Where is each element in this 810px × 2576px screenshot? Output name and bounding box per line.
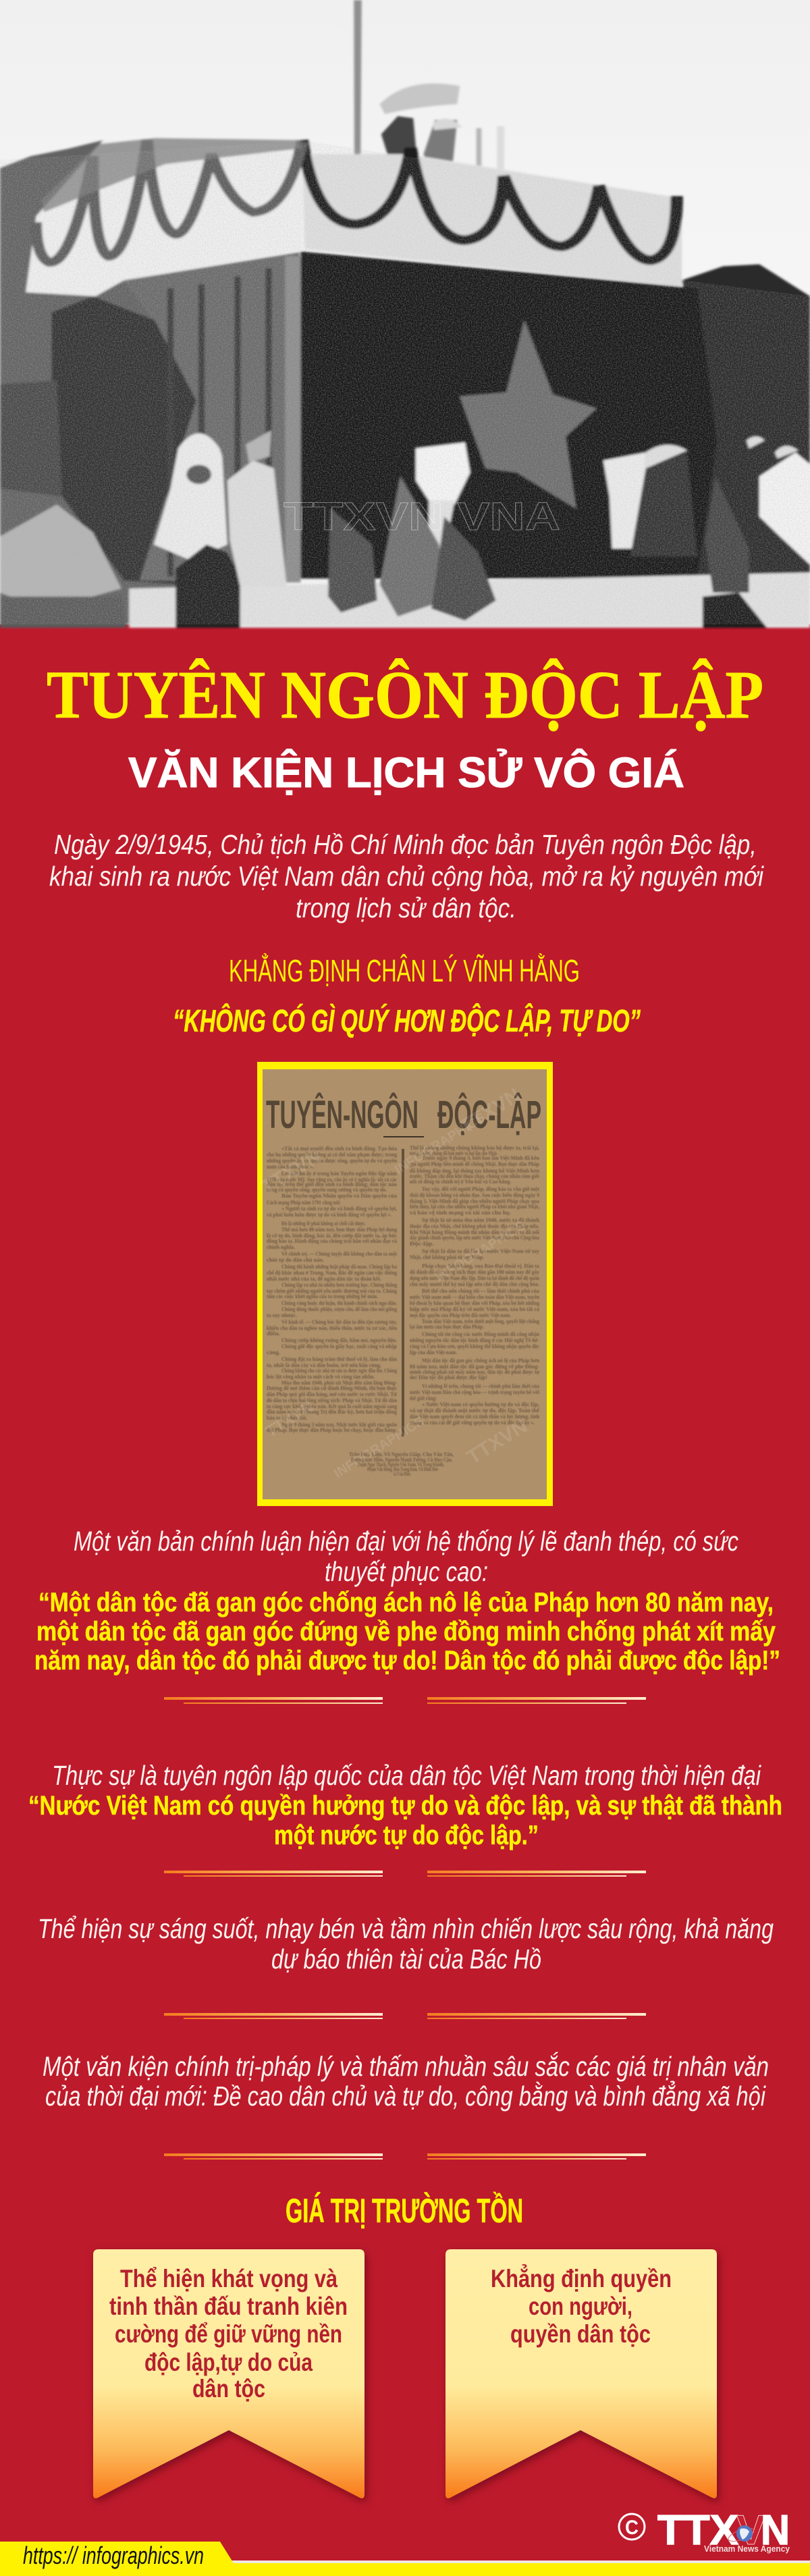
poster body text: tắm các cuộc khởi nghĩa của ta trong những bể máu. [267, 1293, 378, 1299]
document image: declaration poster with yellow frame [257, 1062, 553, 1506]
poster body text: cũng có quyền sống, quyền sung sướng và quyền tự do. [267, 1186, 387, 1193]
statement 2 quote: một nước tự do độc lập.” [274, 1821, 539, 1850]
poster body text: khiến cho dân ta nghèo nàn, thiếu thốn, nước ta xơ xác, tiêu [267, 1324, 397, 1331]
statement 2 quote [28, 1791, 782, 1850]
poster body text: bào ta bị chết đói. [267, 1414, 307, 1421]
poster body text: hiệp ước mà Pháp đã ký về nước Việt-nam, xóa bỏ tất cả [410, 1306, 540, 1312]
poster body text: Toàn dân Việt-nam, trên dưới một lòng, quyết liệt chống [422, 1318, 540, 1324]
poster body text: Trần Huy Liệu, Võ Nguyên Giáp, Chu Văn Tấn, [349, 1451, 454, 1457]
poster body text: thế giới rằng: [410, 1395, 437, 1401]
poster body text: ta càng cực khổ, nghèo nàn. Kết quả là cuối năm ngoái sang [267, 1403, 398, 1410]
poster body text: Chúng lập ra nhà tù nhiều hơn trường học. Chúng thẳng [281, 1281, 398, 1288]
poster body text: và phải luôn luôn được tự do và bình đẳng về quyền lợi ». [267, 1211, 392, 1218]
ribbon card right: Khẳng định quyền [491, 2264, 672, 2292]
poster body text: chính nghĩa. [267, 1243, 295, 1250]
poster body text: dân Pháp quỳ gối đầu hàng, mở cửa nước ta rước Nhật. Từ [267, 1391, 398, 1397]
poster body text: chút tự do dân chủ nào. [267, 1256, 324, 1263]
poster body text: ta, nhất là dân cày và dân buôn, trở nên bần cùng. [267, 1362, 381, 1368]
poster body text: dân Việt-nam quyết đem tất cả tinh thần và lực lượng, tính [410, 1413, 539, 1420]
poster body text: đã đánh đổ các xiềng xích thực dân gần 100 năm nay để gây [410, 1268, 540, 1275]
poster body text: Lê Văn Hiến [394, 1470, 410, 1477]
poster body text: Dương để mở thêm căn cứ đánh Đồng-Minh, thì bọn thực [267, 1385, 397, 1391]
statement 2 [28, 1760, 782, 1850]
subtitle: VĂN KIỆN LỊCH SỬ VÔ GIÁ [128, 749, 684, 797]
poster body text: Thế là chẳng những chúng không bảo hộ được ta, trái lại, [410, 1144, 539, 1151]
ribbon card left: độc lập,tự do của [144, 2349, 313, 2376]
poster body text: 1776 của nước Mỹ. Suy rộng ra, câu ấy có ý nghĩa là: tất cả các [267, 1176, 397, 1183]
ribbon card left: cường để giữ vững nền [115, 2320, 342, 2348]
poster body text: Mùa thu năm 1940, phát-xít Nhật đến xâm lăng Đông- [281, 1379, 397, 1386]
logo: TTXVN Vietnam News Agency: C [625, 2517, 639, 2539]
poster body text: Sự thật là từ mùa thu năm 1940, nước ta đã thành [422, 1216, 539, 1223]
statement 1 [34, 1526, 780, 1675]
ribbon card left: Thể hiện khát vọng và [120, 2265, 338, 2292]
poster body text: điều. [267, 1330, 280, 1337]
poster body text: lại âm mưu của bọn thực dân Pháp. [410, 1323, 484, 1330]
photo: Ho Chi Minh reading the declaration at the stage, 1945 [0, 0, 810, 628]
poster body text: Khi Nhật hàng Đồng-minh thì nhân dân cả nước ta đã nổi [410, 1229, 540, 1235]
poster body text: và bảo vệ tính mạng và tài sản cho họ. [410, 1209, 511, 1216]
poster body text: nước Việt-nam mới — đại biểu cho toàn dân Việt-nam, tuyên [410, 1293, 539, 1300]
poster body text: cho họ những quyền không ai có thể xâm phạm được; trong [267, 1151, 398, 1158]
poster body text: và sự thật đã thành một nước tự do, độc lập. Toàn thể [410, 1407, 539, 1414]
poster body text: do! Dân tộc đó phải được độc lập! [410, 1374, 487, 1380]
statement 3 [38, 1913, 774, 1975]
poster body text: những nguyên tắc dân tộc bình đẳng ở các Hội nghị Tê-hê- [410, 1337, 539, 1343]
poster body text: Sự thật là dân ta đã lấy lại nước Việt-Nam từ tay [422, 1247, 540, 1254]
statement 1 quote [34, 1588, 780, 1675]
poster body text: Đó là những lẽ phải không ai chối cãi được. [281, 1220, 366, 1227]
poster body text: 80 năm nay, một dân tộc đã gan góc đứng về phe Đồng- [410, 1363, 539, 1370]
poster body text: đầu năm nay, từ Quảng Trị đến Bắc-kỳ, hơn hai triệu đồng [267, 1408, 398, 1415]
poster body text: Cách mạng Pháp năm 1791 cũng nói: [267, 1199, 341, 1206]
ribbon card right: quyền dân tộc [510, 2320, 651, 2348]
title: TUYÊN NGÔN ĐỘC LẬP [47, 657, 763, 732]
poster body text: răng và Cựu-kim-sơn, quyết không thể không nhận quyền độc [410, 1343, 539, 1349]
poster body text: Trước ngày 9 tháng 3, biết bao lần Việt-Minh đã kêu [422, 1154, 539, 1161]
poster body text: Về chính trị. — Chúng tuyệt đối không cho dân ta một [281, 1250, 397, 1257]
poster body text: bố thoát ly hẳn quan hệ thực dân với Pháp, xóa bỏ hết những [410, 1299, 540, 1306]
poster body text: mọi đặc quyền của Pháp trên đất nước Việt-nam. [410, 1312, 511, 1318]
poster body text: trong 5 năm, chúng đã bán nước ta hai lần cho Nhật. [410, 1150, 497, 1156]
poster body text: « Nước Việt-nam có quyền hưởng tự do và độc lập, [422, 1401, 539, 1407]
poster body text: mưu cầu hạnh phúc ». [267, 1163, 314, 1170]
poster body text: đồng bào ta. Hành động của chúng trái hẳn với nhân đạo và [267, 1237, 398, 1244]
poster body text: Chúng đặt ra hàng trăm thứ thuế vô lý, làm cho dân [281, 1356, 397, 1362]
poster body text: nốt số đông tù chính trị ở Yên-bái và Cao-bằng. [410, 1178, 511, 1185]
poster heading: TUYÊN-NGÔN [266, 1093, 418, 1137]
document watermarks [257, 1084, 531, 1481]
poster body text: Chúng thi hành những luật pháp dã man. Chúng lập ba [281, 1263, 398, 1270]
poster body text: Lời bất hủ ấy ở trong bản Tuyên-ngôn Độc-lập năm [281, 1170, 397, 1177]
logo: TTXVN Vietnam News Agency: Vietnam News Agency [704, 2544, 790, 2554]
poster body text: Phạm Ngọc Thạch, Nguyễn Văn Xuân, Vũ Trọng Khánh, [358, 1461, 444, 1468]
poster body text: Dương Đức Hiền, Nguyễn Mạnh Tường, Cù Huy Cận, [351, 1456, 452, 1463]
poster body text: chế độ khác nhau ở Trung, Nam, Bắc để ngăn cản việc thống [267, 1269, 398, 1276]
poster body text: Bản Tuyên-ngôn Nhân quyền và Dân quyền của [281, 1192, 398, 1199]
poster body text: những quyền ấy, có quyền được sống, quyền tự do và quyền [267, 1157, 397, 1164]
logo: TTXVN Vietnam News Agency [619, 2507, 790, 2554]
poster body text: «Tất cả mọi người đều sinh ra bình đẳng. Tạo-hóa [281, 1145, 398, 1152]
poster body text: Phạm Văn Đồng, Đào Trọng Kim, Vũ Đình Hòe [367, 1466, 438, 1472]
statement 1: thuyết phục cao: [325, 1556, 488, 1587]
poster body text: đã không đáp ứng, lại thẳng tay khủng bố Việt-Minh hơn [410, 1167, 539, 1174]
poster body text: chủ mấy mươi thế kỷ mà lập nên chế độ dân chủ cộng hòa. [410, 1281, 539, 1287]
document watermarks: TTXVN [263, 1398, 317, 1441]
poster body text: tay chém giết những người yêu nước thương nòi của ta. Chúng [267, 1287, 398, 1294]
poster body text: Độc-lập. [410, 1240, 434, 1247]
ribbon card left [93, 2249, 364, 2498]
document watermarks: TTXVN [463, 1415, 531, 1469]
white-clad figures [154, 433, 227, 560]
statement 4 [43, 2051, 769, 2112]
poster body text: Vì những lẽ trên, chúng tôi — chính phủ lâm thời của [422, 1383, 540, 1389]
poster body text: Tuy vậy, đối với người Pháp, đồng bào ta vẫn giữ một [422, 1185, 539, 1192]
footer band with URL [0, 2542, 810, 2576]
poster body text: bóc lột công nhân ta một cách vô cùng tàn nhẫn. [267, 1373, 375, 1380]
document watermarks: TTXVN [456, 1084, 524, 1138]
poster body text: dậy giành chính quyền, lập nên nước Việt-Nam Dân-chủ Cộng-hòa [410, 1234, 540, 1241]
ribbon card left: tinh thần đấu tranh kiên [109, 2292, 348, 2320]
poster body text: nhất nước nhà của ta, để ngăn dân tộc ta đoàn kết. [267, 1275, 381, 1282]
poster body text: trước. Thậm chí đến khi thua chạy, chúng còn nhẫn tâm giết [410, 1173, 539, 1179]
statement 3: dự báo thiên tài của Bác Hồ [271, 1943, 541, 1975]
poster body text: dân tộc trên thế giới đều sinh ra bình đẳng; dân tộc nào [267, 1181, 397, 1187]
ribbon card left: dân tộc [192, 2375, 265, 2403]
poster body text: Ngày 9 tháng 3 năm nay, Nhật tước khí giới của quân [281, 1421, 397, 1428]
poster body text: Về kinh tế. — Chúng bóc lột dân ta đến tận xương tủy, [281, 1318, 397, 1325]
document watermarks: INFOGRAPHICS [392, 1110, 488, 1177]
poster body text: Bởi thế cho nên chúng tôi — lâm thời chính phủ của [422, 1287, 540, 1294]
ribbon card right [446, 2249, 717, 2498]
photo watermark: TTXVN VNA [284, 495, 560, 539]
poster body text: đó dân ta chịu hai tầng xiềng xích: Pháp và Nhật. Từ đó dân [267, 1397, 397, 1403]
intro paragraph [49, 829, 765, 923]
document watermarks: INFOGRAPHICS [433, 1218, 529, 1285]
poster body text: Pháp chạy, Nhật hàng, vua Bảo-Đại thoái vị. Dân ta [422, 1262, 540, 1269]
footer band with URL: https:// infographics.vn [23, 2542, 204, 2569]
heading: lasting value: GIÁ TRỊ TRƯỜNG TỒN [286, 2192, 523, 2230]
poster heading: ĐỘC-LẬP [437, 1093, 541, 1137]
poster body text: Chúng tôi tin rằng các nước Đồng-minh đã công nhận [422, 1331, 539, 1337]
poster body text: minh chống phát-xít mấy năm nay, dân tộc đó phải được tự [410, 1368, 540, 1375]
document watermarks: INFOGRAPHICS [331, 1414, 427, 1481]
poster body text: mạng và của cải để giữ vững quyền tự do và độc lập ấy ». [410, 1419, 535, 1426]
poster body text: thái độ khoan hồng và nhân đạo. Sau cuộc biến động ngày 9 [410, 1191, 539, 1198]
poster body text: thuộc địa của Nhật, chứ không phải thuộc địa của Pháp nữa. [410, 1223, 539, 1229]
poster body text: lập của dân Việt-nam. [410, 1349, 457, 1356]
poster body text: « Người ta sinh ra tự do và bình đẳng về quyền lợi, [281, 1205, 397, 1212]
section heading: eternal truth: KHẲNG ĐỊNH CHÂN LÝ VĨNH HẰNG [229, 953, 580, 988]
logo: TTXVN Vietnam News Agency: N [761, 2507, 790, 2554]
logo: TTXVN Vietnam News Agency: V [736, 2507, 765, 2554]
poster body text: Nhật, chứ không phải từ tay Pháp. [410, 1254, 484, 1260]
poster body text: nước Việt-nam Dân chủ cộng hòa — trịnh trọng tuyên bố với [410, 1389, 540, 1395]
poster body text: Chúng ràng buộc dư luận, thi hành chính sách ngu dân. [281, 1299, 397, 1306]
poster body text [267, 1144, 540, 1477]
poster body text: Một dân tộc đã gan góc chống ách nô lệ của Pháp hơn [422, 1357, 539, 1364]
poster body text: gọi người Pháp liên minh để chống Nhật. Bọn thực dân Pháp [410, 1160, 539, 1167]
logo: TTXVN Vietnam News Agency: TTX [657, 2507, 738, 2554]
poster body text: Chúng dùng thuốc phiện, rượu cồn, để làm cho nòi giống [281, 1306, 398, 1312]
poster body text: cảng. [267, 1349, 280, 1356]
poster body text: Thế mà hơn 80 năm nay, bọn thực dân Pháp lợi dụng [281, 1226, 398, 1233]
poster body text: tháng 3, Việt-Minh đã giúp cho nhiều người Pháp chạy qua [410, 1198, 540, 1204]
poster body text: Chúng cướp không ruộng đất, hầm mỏ, nguyên liệu. [281, 1337, 397, 1343]
intro paragraph: trong lịch sử dân tộc. [296, 892, 516, 923]
poster body text: Chúng giữ độc quyền in giấy bạc, xuất cảng và nhập [281, 1343, 397, 1349]
poster body text: biên thùy, lại cứu cho nhiều người Pháp ra khỏi nhà giam Nhật, [410, 1203, 539, 1210]
ribbon card right: con người, [529, 2292, 632, 2320]
poster body text: đội Pháp. Bọn thực dân Pháp hoặc bỏ chạy, hoặc đầu hàng. [267, 1426, 397, 1433]
poster body text: dựng nên nước Việt-Nam độc lập. Dân ta lại đánh đổ chế độ quân [410, 1274, 539, 1281]
document watermarks: TTXVN [257, 1145, 325, 1199]
poster body text: ta suy nhược. [267, 1312, 297, 1318]
poster body text: Chúng không cho các nhà tư sản ta được ngóc đầu lên. Chúng [281, 1367, 398, 1374]
poster body text: lá cờ tự do, bình đẳng, bác ái, đến cướp đất nước ta, áp bức [267, 1232, 397, 1239]
